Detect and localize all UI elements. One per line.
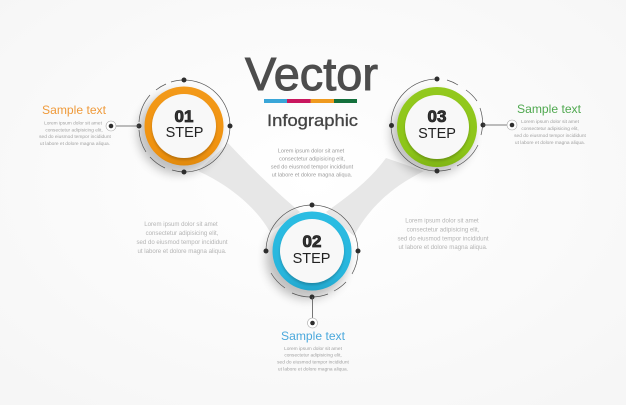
- step 2 white disc: [280, 219, 344, 283]
- right lower text block: [397, 218, 489, 251]
- step 2 node: [264, 202, 360, 300]
- centre text block: sed do eiusmod tempor incididunt: [271, 164, 354, 170]
- step 3 connector: [483, 120, 517, 130]
- step 2 number: 02: [303, 232, 321, 251]
- colour bar: [264, 99, 357, 103]
- step 1 caption: sed do eiusmod tempor incididunt: [39, 134, 112, 140]
- step 1 caption: [39, 103, 112, 147]
- step 3 node: [389, 76, 486, 175]
- step 3 caption: consectetur adipisicing elit,: [521, 126, 579, 132]
- right lower text block: consectetur adipisicing elit,: [407, 226, 480, 234]
- step 1 label: STEP: [166, 125, 203, 141]
- left lower text block: sed do eiusmod tempor incididunt: [136, 239, 228, 246]
- step 1 shadow: [138, 92, 220, 174]
- step 2 caption: [277, 329, 350, 372]
- step 1 caption: Sample text: [42, 103, 107, 117]
- ribbon connector: step 1 to step 2: [198, 143, 300, 232]
- step 1 white disc: [152, 94, 216, 158]
- step 1 node: [136, 78, 232, 174]
- left lower text block: ut labore et dolore magna aliqua.: [137, 248, 227, 255]
- step 1 orange ring: [144, 86, 224, 166]
- step 3 number: 03: [428, 107, 446, 126]
- right lower text block: sed do eiusmod tempor incididunt: [397, 236, 489, 242]
- step 3 shadow: [391, 93, 473, 175]
- step 2 anchor dots: [264, 202, 360, 300]
- right lower text block: ut labore et dolore magna aliqua.: [398, 244, 488, 251]
- right lower text block: Lorem ipsum dolor sit amet: [405, 218, 479, 224]
- left lower text block: consectetur adipisicing elit,: [146, 230, 219, 237]
- step 1 caption: consectetur adipisicing elit,: [45, 128, 103, 134]
- centre text block: [271, 148, 354, 178]
- step 3 caption: sed do eiusmod tempor incididunt: [514, 133, 587, 139]
- step 1 caption: ut labore et dolore magna aliqua.: [40, 141, 110, 147]
- step 3 caption: [514, 102, 587, 146]
- step 2 caption: consectetur adipisicing elit,: [284, 352, 342, 358]
- step 2 connector: [308, 297, 318, 328]
- step 3 anchor dots: [389, 76, 486, 174]
- step 3 caption: Lorem ipsum dolor sit amet: [521, 119, 580, 125]
- step 1 caption: Lorem ipsum dolor sit amet: [44, 120, 103, 126]
- step 2 blue ring: [272, 212, 352, 290]
- step 1 number: 01: [175, 107, 193, 126]
- step 1 connector: [106, 121, 139, 131]
- step 3 caption: ut labore et dolore magna aliqua.: [515, 140, 585, 146]
- centre text block: ut labore et dolore magna aliqua.: [272, 172, 353, 178]
- step 2 caption: Sample text: [281, 329, 346, 343]
- step 2 caption: sed do eiusmod tempor incididunt: [277, 360, 350, 366]
- step 3 dashed orbit: [391, 79, 483, 171]
- step 1 anchor dots: [136, 78, 232, 174]
- step 3 white disc: [405, 95, 469, 159]
- step 2 dashed orbit: [266, 205, 358, 297]
- left lower text block: Lorem ipsum dolor sit amet: [144, 221, 218, 228]
- centre text block: Lorem ipsum dolor sit amet: [278, 148, 345, 154]
- step 3 label: STEP: [418, 126, 456, 142]
- step 2 caption: ut labore et dolore magna aliqua.: [278, 366, 348, 372]
- left lower text block: [136, 221, 228, 255]
- step 3 caption: Sample text: [517, 102, 582, 116]
- ribbon connector: step 3 to step 2: [326, 158, 424, 236]
- step 3 green ring: [397, 87, 477, 167]
- subtitle: Infographic: [267, 111, 359, 130]
- title: Vector: [245, 48, 378, 100]
- step 1 dashed orbit: [139, 80, 230, 172]
- step 2 shadow: [266, 217, 348, 299]
- step 2 caption: Lorem ipsum dolor sit amet: [284, 346, 343, 352]
- step 2 label: STEP: [293, 251, 330, 267]
- centre text block: consectetur adipisicing elit,: [279, 156, 345, 162]
